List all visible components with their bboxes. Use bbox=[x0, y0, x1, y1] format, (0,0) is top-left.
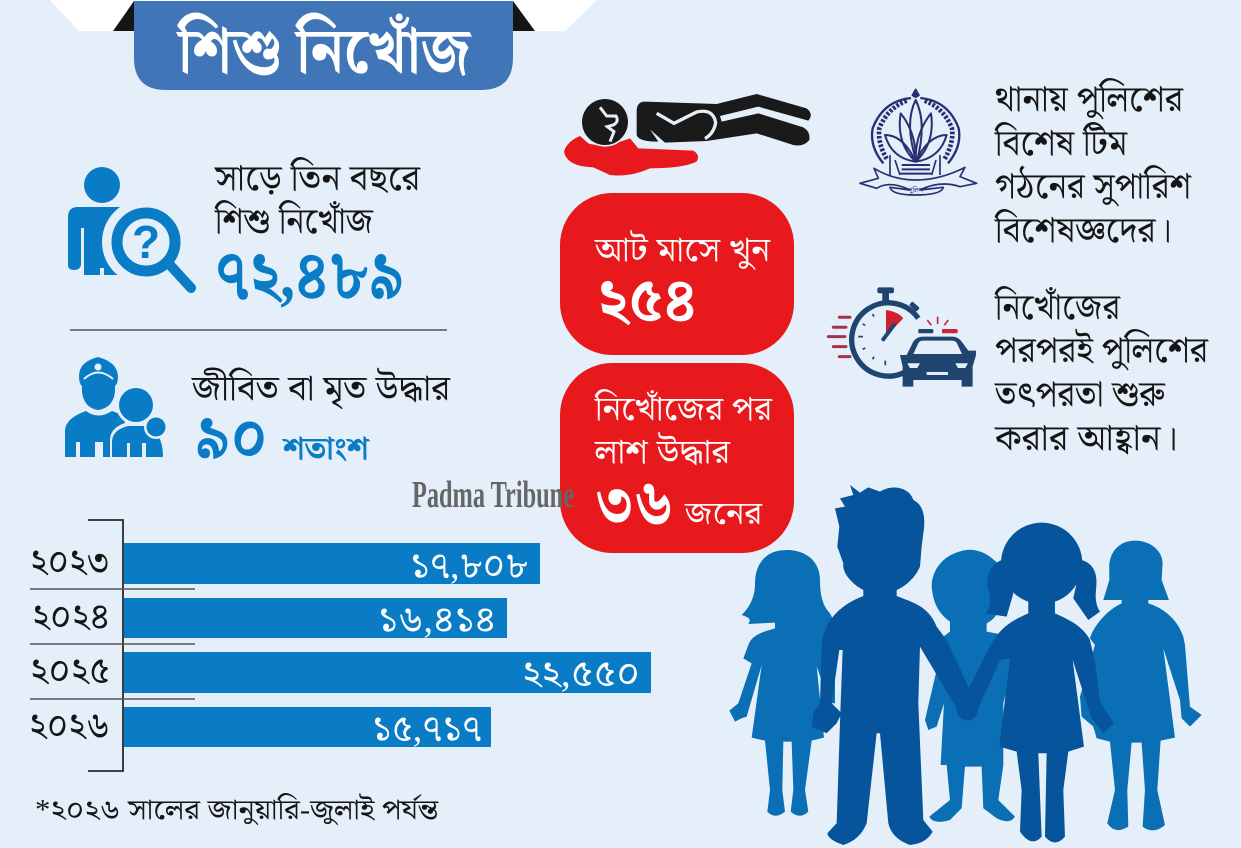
text: call for prompt police action bbox=[993, 285, 1210, 458]
text: special police team recommendation bbox=[993, 77, 1193, 250]
number: 36 people: জনের bbox=[684, 495, 764, 531]
icon: person with magnifier bbox=[68, 167, 191, 288]
bar 2025: ২০২৫ bbox=[30, 650, 110, 692]
text: call for prompt police action: পরপরই পুলিশের bbox=[995, 328, 1210, 371]
panel: recovered share bbox=[65, 357, 451, 471]
bar 2023: ২০২৩ bbox=[30, 541, 110, 583]
bar 2024: ১৬,৪১৪ bbox=[378, 599, 496, 641]
bar 2023: ১৭,৮০৮ bbox=[410, 545, 528, 587]
icon: police with child bbox=[65, 357, 168, 457]
panel: murders in eight months bbox=[560, 193, 794, 355]
text: recovered alive or dead: জীবিত বা মৃত উদ্ধার bbox=[190, 367, 451, 410]
text: three and a half years missing: সাড়ে তিন বছরে bbox=[213, 156, 422, 198]
bar 2025: ২২,৫৫০ bbox=[522, 653, 640, 695]
number: 254: ২৫৪ bbox=[597, 266, 697, 334]
footnote: *২০২৬ সালের জানুয়ারি-জুলাই পর্যন্ত bbox=[35, 792, 440, 826]
title banner bbox=[113, 1, 535, 90]
text: murdered in eight months: আট মাসে খুন bbox=[594, 230, 771, 271]
panel: missing children total bbox=[68, 156, 422, 312]
text: call for prompt police action: নিখোঁজের bbox=[993, 285, 1122, 327]
bar 2025 bbox=[30, 650, 651, 695]
front row children bbox=[812, 485, 1114, 845]
bar 2026: ১৫,৭১৭ bbox=[372, 708, 482, 750]
panel: bodies recovered after missing bbox=[560, 363, 794, 553]
text: bodies recovered after going missing bbox=[594, 389, 774, 471]
text: special police team recommendation: বিশেষ টিম bbox=[993, 121, 1128, 163]
bar chart: missing children by year bbox=[29, 520, 651, 771]
text: special police team recommendation: থানায় পুলিশের bbox=[995, 77, 1185, 120]
bar 2026: ২০২৬ bbox=[29, 705, 110, 747]
number: 36 people bbox=[595, 469, 764, 537]
title banner: শিশু নিখোঁজ bbox=[175, 12, 473, 86]
text: bodies recovered after going missing: নিখোঁজের পর bbox=[594, 389, 774, 428]
icon: stopwatch and police car bbox=[828, 287, 976, 387]
panel: recovered share: শতাংশ bbox=[281, 430, 371, 466]
watermark: Padma Tribune bbox=[412, 474, 574, 516]
text: special police team recommendation: গঠনের সুপারিশ bbox=[995, 164, 1193, 207]
text: special police team recommendation: বিশেষজ্ঞদের। bbox=[993, 208, 1172, 250]
text: call for prompt police action: করার আহ্বান। bbox=[993, 418, 1178, 458]
icon: body with blood bbox=[564, 94, 811, 175]
number: 72,489: ৭২,৪৮৯ bbox=[215, 236, 405, 312]
icon: police emblem: পুলিশ bbox=[908, 185, 924, 195]
number: 90 percent: ৯০ bbox=[194, 403, 267, 471]
back row children bbox=[729, 541, 1202, 830]
text: bodies recovered after going missing: লাশ উদ্ধার bbox=[594, 431, 732, 471]
illustration: children silhouettes bbox=[729, 485, 1202, 845]
bar 2024: ২০২৪ bbox=[32, 596, 110, 638]
number: 36 people: ৩৬ bbox=[595, 469, 673, 537]
icon: police emblem bbox=[860, 89, 977, 195]
bar 2023 bbox=[30, 541, 540, 587]
text: call for prompt police action: তৎপরতা শুরু bbox=[993, 374, 1166, 414]
bar 2026 bbox=[29, 705, 491, 750]
bar 2024 bbox=[32, 596, 507, 641]
panel: missing children total: শিশু নিখোঁজ bbox=[213, 199, 374, 241]
icon: person with magnifier: ? bbox=[132, 216, 160, 268]
